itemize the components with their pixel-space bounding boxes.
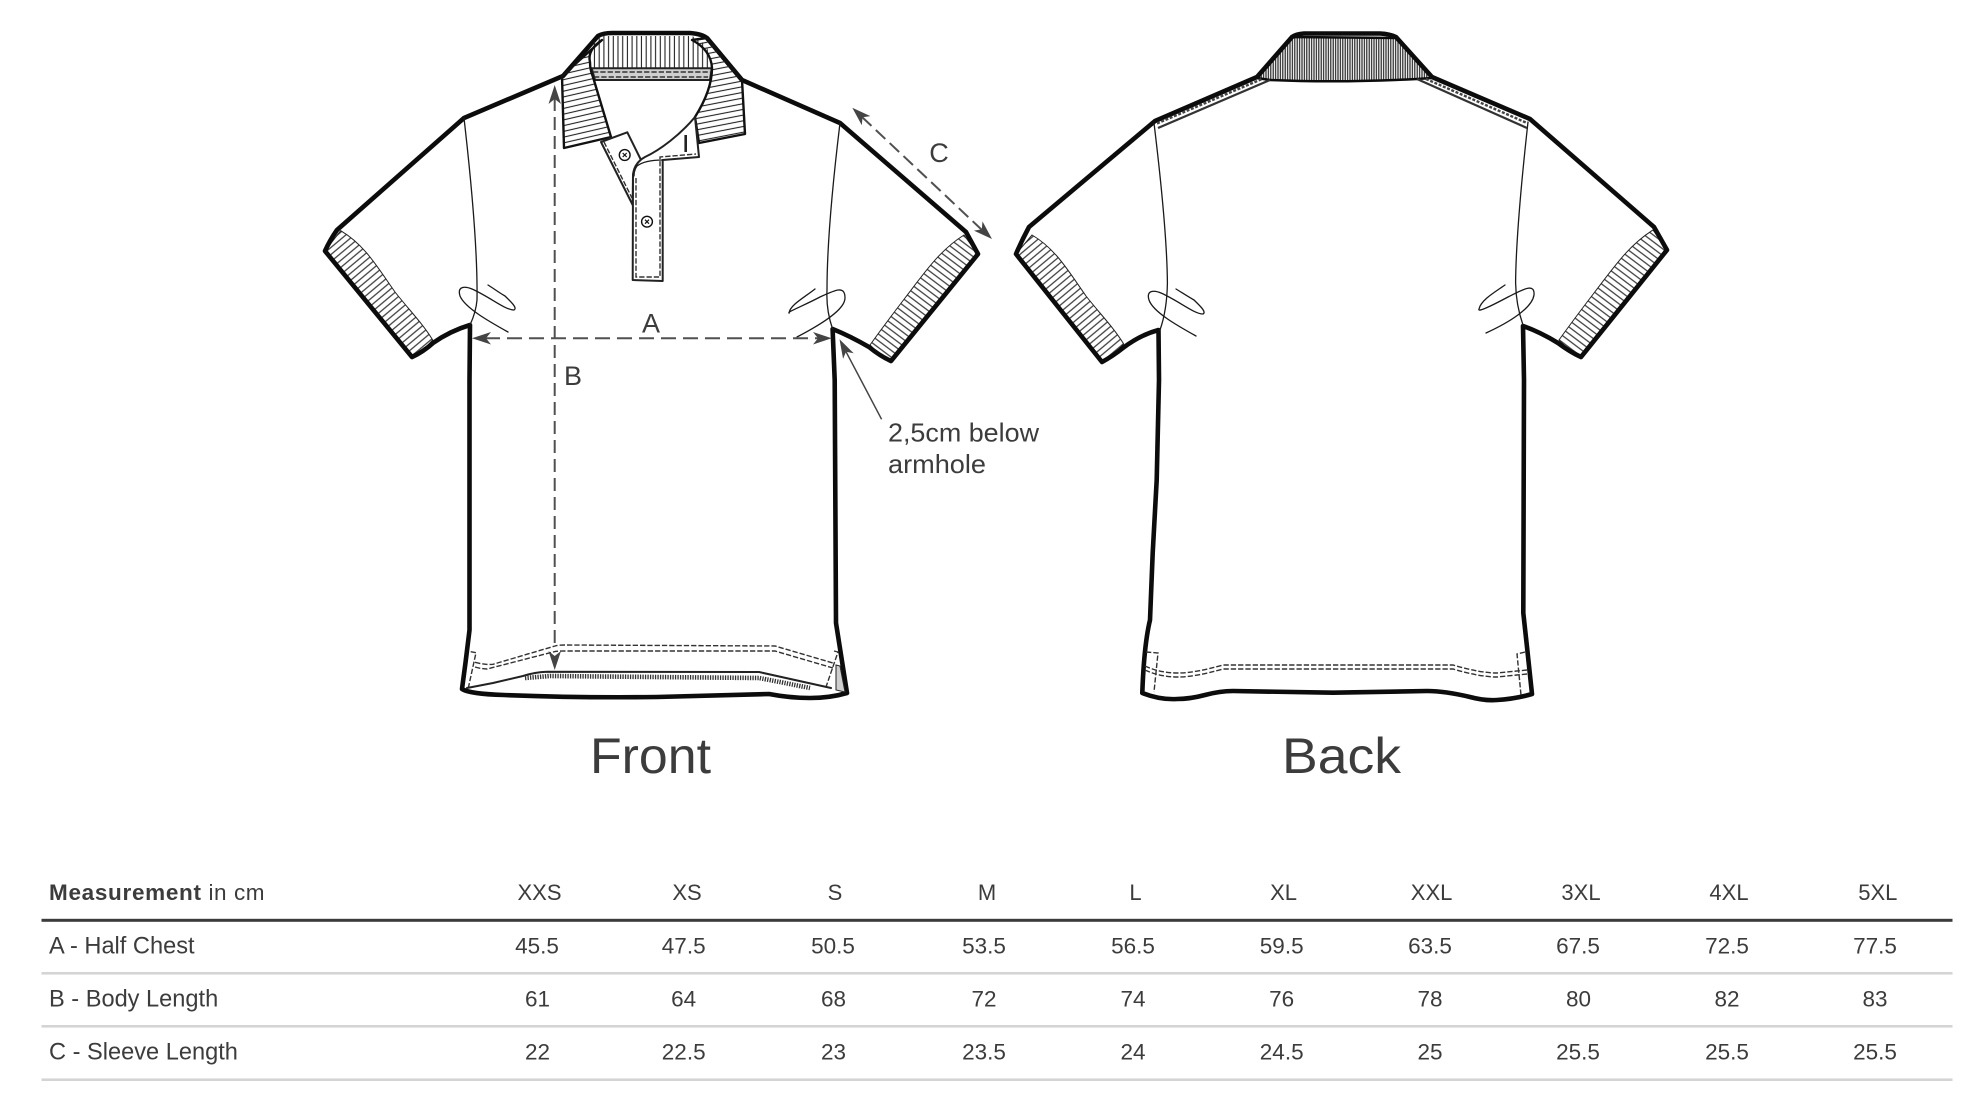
row: body length: 72 bbox=[971, 986, 997, 1012]
table header: 4XL bbox=[1709, 880, 1749, 905]
row: half chest: 63.5 bbox=[1408, 934, 1452, 958]
body length measurement arrow B: B bbox=[564, 361, 582, 391]
row: half chest: 67.5 bbox=[1556, 934, 1600, 958]
row: sleeve length: 24.5 bbox=[1260, 1040, 1304, 1064]
row: half chest: 72.5 bbox=[1705, 934, 1749, 958]
callout: measuring point below armhole: armhole bbox=[888, 449, 986, 479]
table header bbox=[49, 880, 1897, 905]
half chest measurement arrow A bbox=[472, 308, 832, 344]
sleeve length measurement arrow C bbox=[852, 108, 992, 239]
row: body length: 80 bbox=[1566, 986, 1591, 1012]
table header: XL bbox=[1270, 880, 1297, 905]
row: half chest: 56.5 bbox=[1111, 934, 1155, 958]
table header: Measurement bbox=[49, 880, 202, 905]
row: half chest: 53.5 bbox=[962, 934, 1006, 958]
sleeve length measurement arrow C: C bbox=[929, 138, 949, 168]
right yoke stitching bbox=[1417, 79, 1527, 128]
row: sleeve length: 25.5 bbox=[1556, 1040, 1600, 1064]
collar button bbox=[619, 150, 630, 160]
row: sleeve length: 25.5 bbox=[1705, 1040, 1749, 1064]
placket stitching bbox=[604, 142, 696, 277]
row: sleeve length: 24 bbox=[1120, 1040, 1146, 1064]
row: body length bbox=[49, 986, 1888, 1012]
back neck rib inside collar bbox=[590, 36, 712, 68]
back hem inner line bbox=[467, 672, 831, 688]
front left fold swirl bbox=[459, 285, 515, 332]
row: half chest bbox=[49, 934, 1897, 960]
row: body length: 68 bbox=[821, 986, 846, 1012]
row: body length: 74 bbox=[1120, 986, 1146, 1012]
table header: in cm bbox=[208, 880, 264, 905]
front view of polo shirt bbox=[325, 33, 978, 698]
buttonhole bar bbox=[684, 135, 687, 152]
row: sleeve length bbox=[49, 1040, 1897, 1066]
row: sleeve length: 25 bbox=[1417, 1040, 1443, 1064]
body length measurement arrow B bbox=[548, 85, 582, 670]
ribbed inner hem bbox=[525, 676, 810, 688]
row: body length: 78 bbox=[1417, 986, 1443, 1012]
table header: XXS bbox=[517, 880, 562, 905]
left yoke stitching bbox=[1157, 79, 1270, 128]
back hem stitching bbox=[1145, 665, 1527, 677]
front right fold swirl bbox=[789, 289, 845, 337]
front left sleeve cuff bbox=[325, 231, 433, 357]
row: half chest: 45.5 bbox=[515, 934, 559, 958]
table header: L bbox=[1129, 880, 1142, 905]
side vent shadow bbox=[836, 665, 845, 692]
row: sleeve length: 23.5 bbox=[962, 1040, 1006, 1064]
back garment outline bbox=[1016, 34, 1667, 700]
size table bbox=[42, 880, 1952, 1081]
row: half chest: 59.5 bbox=[1260, 934, 1304, 958]
half chest measurement arrow A: A bbox=[642, 308, 660, 338]
left placket flap bbox=[601, 132, 641, 205]
front right sleeve cuff bbox=[870, 235, 978, 360]
callout: measuring point below armhole: 2,5cm below bbox=[888, 418, 1039, 448]
back view of polo shirt bbox=[1016, 34, 1667, 700]
table header: M bbox=[978, 880, 996, 905]
back side vent tacks bbox=[1146, 652, 1525, 695]
back collar bbox=[1257, 37, 1432, 81]
back right sleeve cuff bbox=[1559, 230, 1667, 357]
front hem stitching bbox=[475, 645, 833, 669]
heading: Back: Back bbox=[1282, 728, 1402, 784]
row: sleeve length: 25.5 bbox=[1853, 1040, 1897, 1064]
row: sleeve length: 23 bbox=[821, 1040, 846, 1064]
row: half chest: 47.5 bbox=[662, 934, 706, 958]
back armhole seams bbox=[1154, 122, 1528, 330]
neck band with stitching bbox=[592, 68, 712, 80]
row: body length: 83 bbox=[1862, 986, 1888, 1012]
right collar leaf bbox=[692, 38, 745, 143]
row: body length: 61 bbox=[525, 986, 550, 1012]
callout: measuring point below armhole bbox=[840, 339, 1039, 479]
placket button bbox=[642, 216, 652, 227]
table header: 5XL bbox=[1858, 880, 1897, 905]
front garment outline bbox=[325, 33, 978, 698]
side vent tacks bbox=[468, 651, 838, 688]
row: body length: 82 bbox=[1714, 986, 1740, 1012]
left collar leaf bbox=[562, 40, 611, 148]
table header: S bbox=[828, 880, 842, 905]
row: sleeve length: 22 bbox=[525, 1040, 550, 1064]
table header: 3XL bbox=[1561, 880, 1601, 905]
row: half chest: 77.5 bbox=[1853, 934, 1897, 958]
back left sleeve cuff bbox=[1016, 235, 1124, 362]
front body silhouette bbox=[325, 33, 978, 698]
row: body length: B - Body Length bbox=[49, 986, 218, 1012]
heading: Front: Front bbox=[590, 728, 711, 784]
right placket panel bbox=[633, 117, 699, 281]
row: half chest: A - Half Chest bbox=[49, 934, 195, 960]
row: body length: 64 bbox=[671, 986, 696, 1012]
placket top fold bbox=[634, 160, 663, 176]
table header: XXL bbox=[1411, 880, 1452, 905]
back left fold swirl bbox=[1148, 289, 1204, 336]
table header: XS bbox=[672, 880, 702, 905]
back right fold swirl bbox=[1479, 285, 1534, 333]
row: sleeve length: C - Sleeve Length bbox=[49, 1040, 238, 1066]
armhole seams bbox=[464, 118, 840, 329]
row: half chest: 50.5 bbox=[811, 934, 855, 958]
row: body length: 76 bbox=[1269, 986, 1294, 1012]
row: sleeve length: 22.5 bbox=[662, 1040, 706, 1064]
